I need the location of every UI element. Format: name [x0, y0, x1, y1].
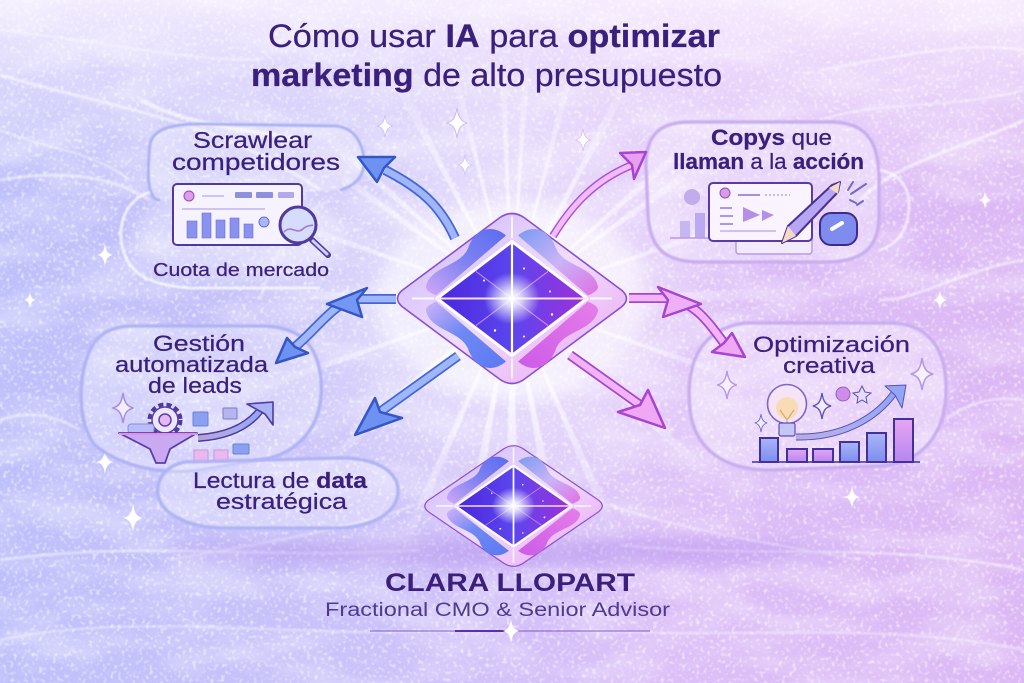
panel: copys que llaman a la accion	[646, 122, 909, 262]
label: lectura de data estrategica	[193, 468, 368, 514]
label: cuota de mercado: Cuota de mercado	[153, 259, 329, 280]
heading: optimizacion creativa: Optimización	[753, 332, 910, 357]
author role: Fractional CMO & Senior Advisor	[325, 600, 671, 621]
heading: copys que llaman a la accion: llaman a la acción	[673, 149, 864, 174]
arrow: to gestion de leads	[276, 288, 396, 363]
arrow: to copys	[553, 152, 646, 236]
heading: gestion automatizada de leads: de leads	[148, 373, 242, 398]
title	[251, 18, 722, 93]
heading: copys que llaman a la accion: Copys que	[711, 125, 832, 150]
arrow: to lower right	[570, 355, 665, 428]
author name: CLARA LLOPART	[385, 569, 635, 597]
arrow: to lectura de data	[355, 356, 458, 435]
arrow: to scrawlear competidores	[358, 157, 455, 238]
heading: scrawlear competidores: competidores	[172, 149, 340, 175]
label: lectura de data estrategica: estratégica	[216, 489, 348, 514]
panel: lectura de data estrategica	[158, 458, 398, 528]
heading: gestion automatizada de leads: Gestión	[153, 331, 245, 356]
icon: funnel, gear and growth arrow	[112, 393, 273, 463]
icon: dashboard with magnifier	[173, 184, 328, 255]
heading: gestion automatizada de leads: automatizada	[115, 352, 269, 377]
decorative sparkles	[24, 108, 991, 532]
icon: light bulb, bars and rising arrow	[717, 358, 933, 462]
panel: scrawlear competidores	[121, 124, 364, 288]
heading: optimizacion creativa	[753, 332, 910, 378]
title: Cómo usar IA para optimizar	[268, 18, 720, 54]
heading: optimizacion creativa: creativa	[783, 353, 876, 378]
central gem	[398, 214, 626, 384]
panel: optimizacion creativa	[689, 323, 946, 470]
heading: scrawlear competidores	[172, 127, 340, 175]
label: lectura de data estrategica: Lectura de data	[193, 468, 368, 493]
heading: scrawlear competidores: Scrawlear	[193, 127, 312, 153]
heading: gestion automatizada de leads	[115, 331, 269, 398]
title: marketing de alto presupuesto	[251, 57, 722, 93]
footer divider with glow	[370, 619, 650, 643]
signature gem	[425, 446, 602, 566]
panel: gestion automatizada de leads	[81, 326, 321, 471]
arrow: to optimizacion creativa	[629, 287, 745, 357]
heading: copys que llaman a la accion	[673, 125, 864, 174]
icon: copy card and pencil	[670, 182, 866, 254]
